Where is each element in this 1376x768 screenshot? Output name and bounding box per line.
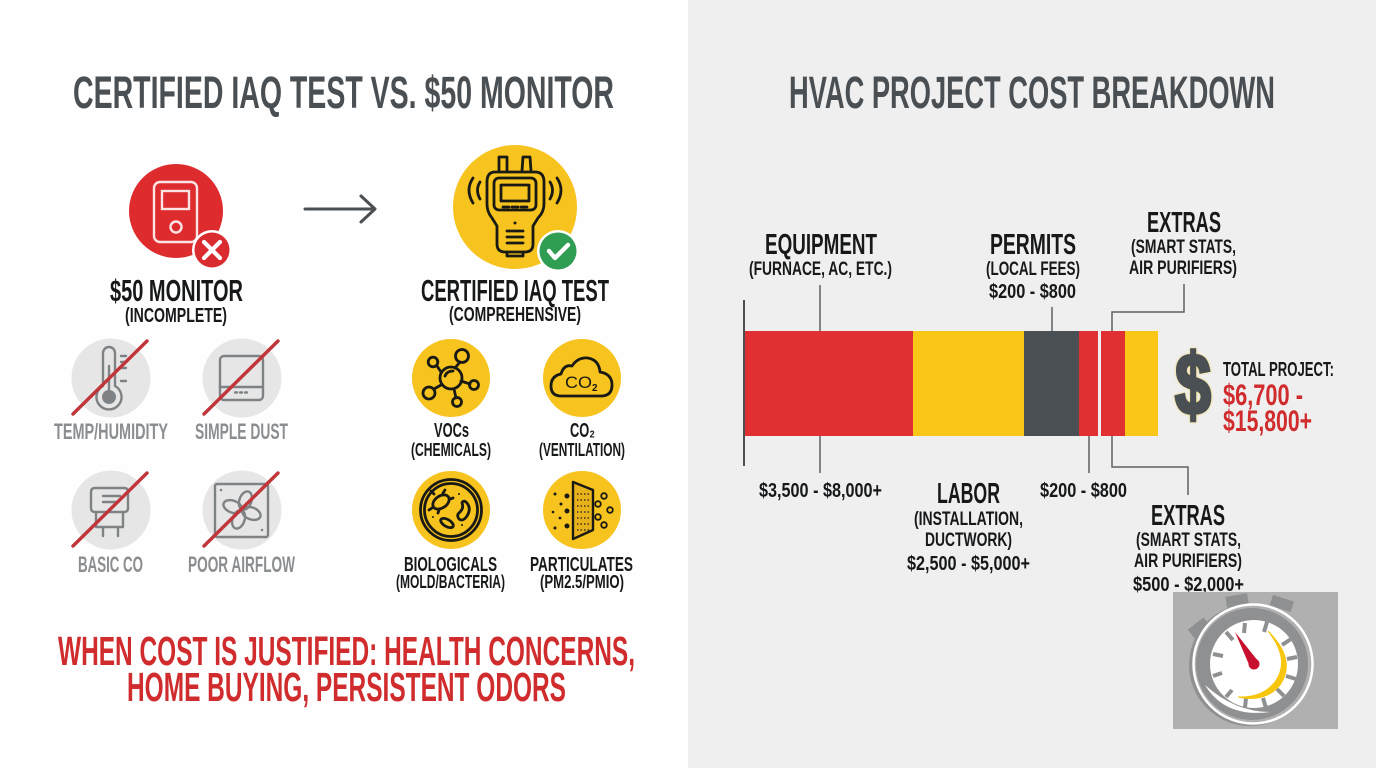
icon: basic CO crossed out <box>72 470 150 550</box>
label: particulates: PARTICULATES <box>530 553 633 576</box>
label: VOCs: VOCs <box>434 419 469 442</box>
label: VOCs <box>411 419 491 460</box>
label: $50 monitor <box>110 273 243 327</box>
total project: $6,700 - <box>1223 379 1303 412</box>
label: extras bottom: EXTRAS <box>1151 500 1225 532</box>
label: equipment <box>749 229 892 280</box>
total project: $15,800+ <box>1223 405 1312 438</box>
label: CO2: (VENTILATION) <box>539 439 625 460</box>
label: permits: $200 - $800 <box>989 281 1076 303</box>
label: extras bottom: $500 - $2,000+ <box>1133 574 1244 596</box>
label: equipment: (FURNACE, AC, ETC.) <box>749 258 892 280</box>
label: $50 monitor: (INCOMPLETE) <box>125 304 227 327</box>
callout: when cost is justified <box>58 628 635 710</box>
label: labor <box>907 478 1030 575</box>
icon: VOCs molecule <box>412 339 490 417</box>
label: equipment: EQUIPMENT <box>765 229 877 261</box>
label: extras top: EXTRAS <box>1147 207 1221 239</box>
label: certified IAQ test: CERTIFIED IAQ TEST <box>421 273 609 308</box>
label: permits: (LOCAL FEES) <box>986 258 1080 280</box>
label: labor: $2,500 - $5,000+ <box>907 553 1030 575</box>
label: CO2: CO₂ <box>570 419 595 442</box>
icon: stopwatch <box>1173 592 1338 729</box>
heading: left title: CERTIFIED IAQ TEST VS. $50 MONITOR <box>73 67 614 118</box>
label: extras bottom: (SMART STATS, <box>1136 529 1241 551</box>
label: certified IAQ test <box>421 273 609 326</box>
label: temp humidity: TEMP/HUMIDITY <box>54 419 168 444</box>
label: $50 monitor: $50 MONITOR <box>110 273 243 308</box>
icon: CO2 cloud <box>543 339 621 417</box>
label: labor: DUCTWORK) <box>925 529 1012 551</box>
label: biologicals: (MOLD/BACTERIA) <box>396 571 505 592</box>
icon: temperature humidity crossed out <box>72 338 150 418</box>
arrow <box>305 196 375 222</box>
label: biologicals: BIOLOGICALS <box>404 553 497 576</box>
callout: when cost is justified: HOME BUYING, PERSISTENT ODORS <box>127 664 566 710</box>
group: comprehensive test measures <box>396 339 633 592</box>
label: poor airflow: POOR AIRFLOW <box>188 552 295 577</box>
label: permits: PERMITS <box>990 229 1076 261</box>
icon: particulates filter <box>543 471 621 549</box>
icon: CO2 cloud: 2 <box>592 383 598 394</box>
panel: certified IAQ test vs monitor <box>54 67 635 710</box>
group: incomplete monitor measures <box>54 338 295 577</box>
label: biologicals <box>396 553 505 592</box>
icon: poor airflow fan crossed out <box>202 470 282 550</box>
label: extras top <box>1129 207 1237 279</box>
value: permits cost below bar: $200 - $800 <box>1040 480 1127 502</box>
icon: certified IAQ meter with check badge <box>453 145 579 272</box>
total project <box>1223 358 1334 438</box>
label: CO2 <box>539 419 625 460</box>
label: extras bottom: AIR PURIFIERS) <box>1134 550 1242 572</box>
label: basic CO: BASIC CO <box>78 552 143 577</box>
label: certified IAQ test: (COMPREHENSIVE) <box>449 303 581 326</box>
label: extras top: AIR PURIFIERS) <box>1129 257 1237 279</box>
label: particulates: (PM2.5/PMIO) <box>540 571 624 592</box>
label: extras top: (SMART STATS, <box>1131 236 1236 258</box>
icon: simple dust crossed out <box>202 338 282 418</box>
icon: $50 monitor with X badge <box>129 164 232 270</box>
label: permits <box>986 229 1080 303</box>
label: simple dust: SIMPLE DUST <box>195 419 288 444</box>
icon: biologicals petri dish <box>412 471 490 549</box>
label: labor: LABOR <box>937 478 1000 510</box>
chart: stacked cost bar <box>743 284 1188 495</box>
callout: when cost is justified: WHEN COST IS JUSTIFIED: HEALTH CONCERNS, <box>58 628 635 674</box>
panel: HVAC cost breakdown <box>743 67 1338 729</box>
label: labor: (INSTALLATION, <box>914 508 1023 530</box>
label: VOCs: (CHEMICALS) <box>411 439 491 460</box>
icon: dollar sign: $ <box>1175 337 1211 433</box>
label: particulates <box>530 553 633 592</box>
value: equipment cost: $3,500 - $8,000+ <box>759 480 882 502</box>
icon: CO2 cloud: CO <box>565 373 592 392</box>
label: extras bottom <box>1133 500 1244 596</box>
